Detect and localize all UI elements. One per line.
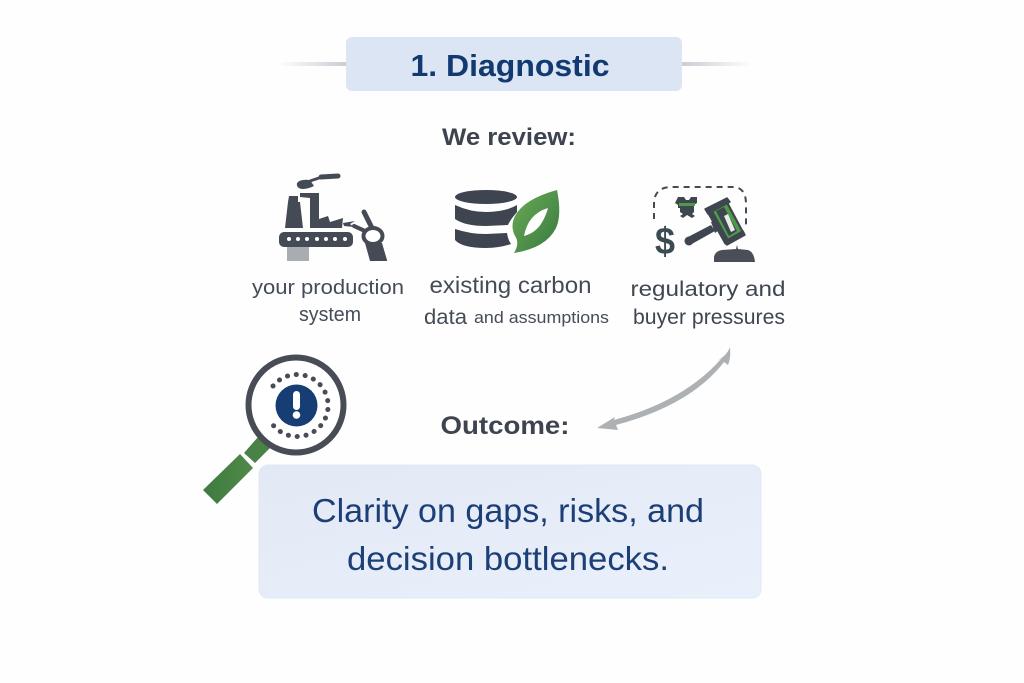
label: regulatory and buyer pressures (630, 277, 786, 329)
header: 1. Diagnostic: 1. Diagnostic (410, 48, 610, 83)
label: existing carbon data and assumptions: and assumptions (474, 309, 609, 327)
label: regulatory and buyer pressures: regulatory and (630, 277, 786, 301)
label: existing carbon data and assumptions: existing carbon (430, 272, 592, 298)
arrow: curved double-headed (597, 347, 730, 430)
header: 1. Diagnostic (278, 37, 752, 91)
label: your production system (252, 277, 404, 326)
panel: outcome statement: decision bottlenecks. (347, 540, 669, 577)
label: existing carbon data and assumptions (424, 272, 609, 329)
icon: factory with conveyor and robotic arm (279, 176, 387, 261)
icon: gavel, dollar and dashed frame: $ (655, 221, 675, 263)
panel: outcome statement (259, 465, 761, 598)
label: your production system: system (299, 304, 361, 326)
label: regulatory and buyer pressures: buyer pressures (633, 305, 785, 329)
panel: outcome statement: Clarity on gaps, risks, and (312, 492, 704, 529)
label: your production system: your production (252, 277, 404, 299)
heading: We review: We review: (442, 124, 576, 151)
icon: database with leaf (455, 190, 559, 253)
label: existing carbon data and assumptions: data (424, 306, 467, 329)
heading: Outcome: Outcome: (440, 412, 570, 440)
icon: gavel, dollar and dashed frame (654, 187, 755, 263)
icon: magnifying glass with alert (203, 358, 344, 504)
